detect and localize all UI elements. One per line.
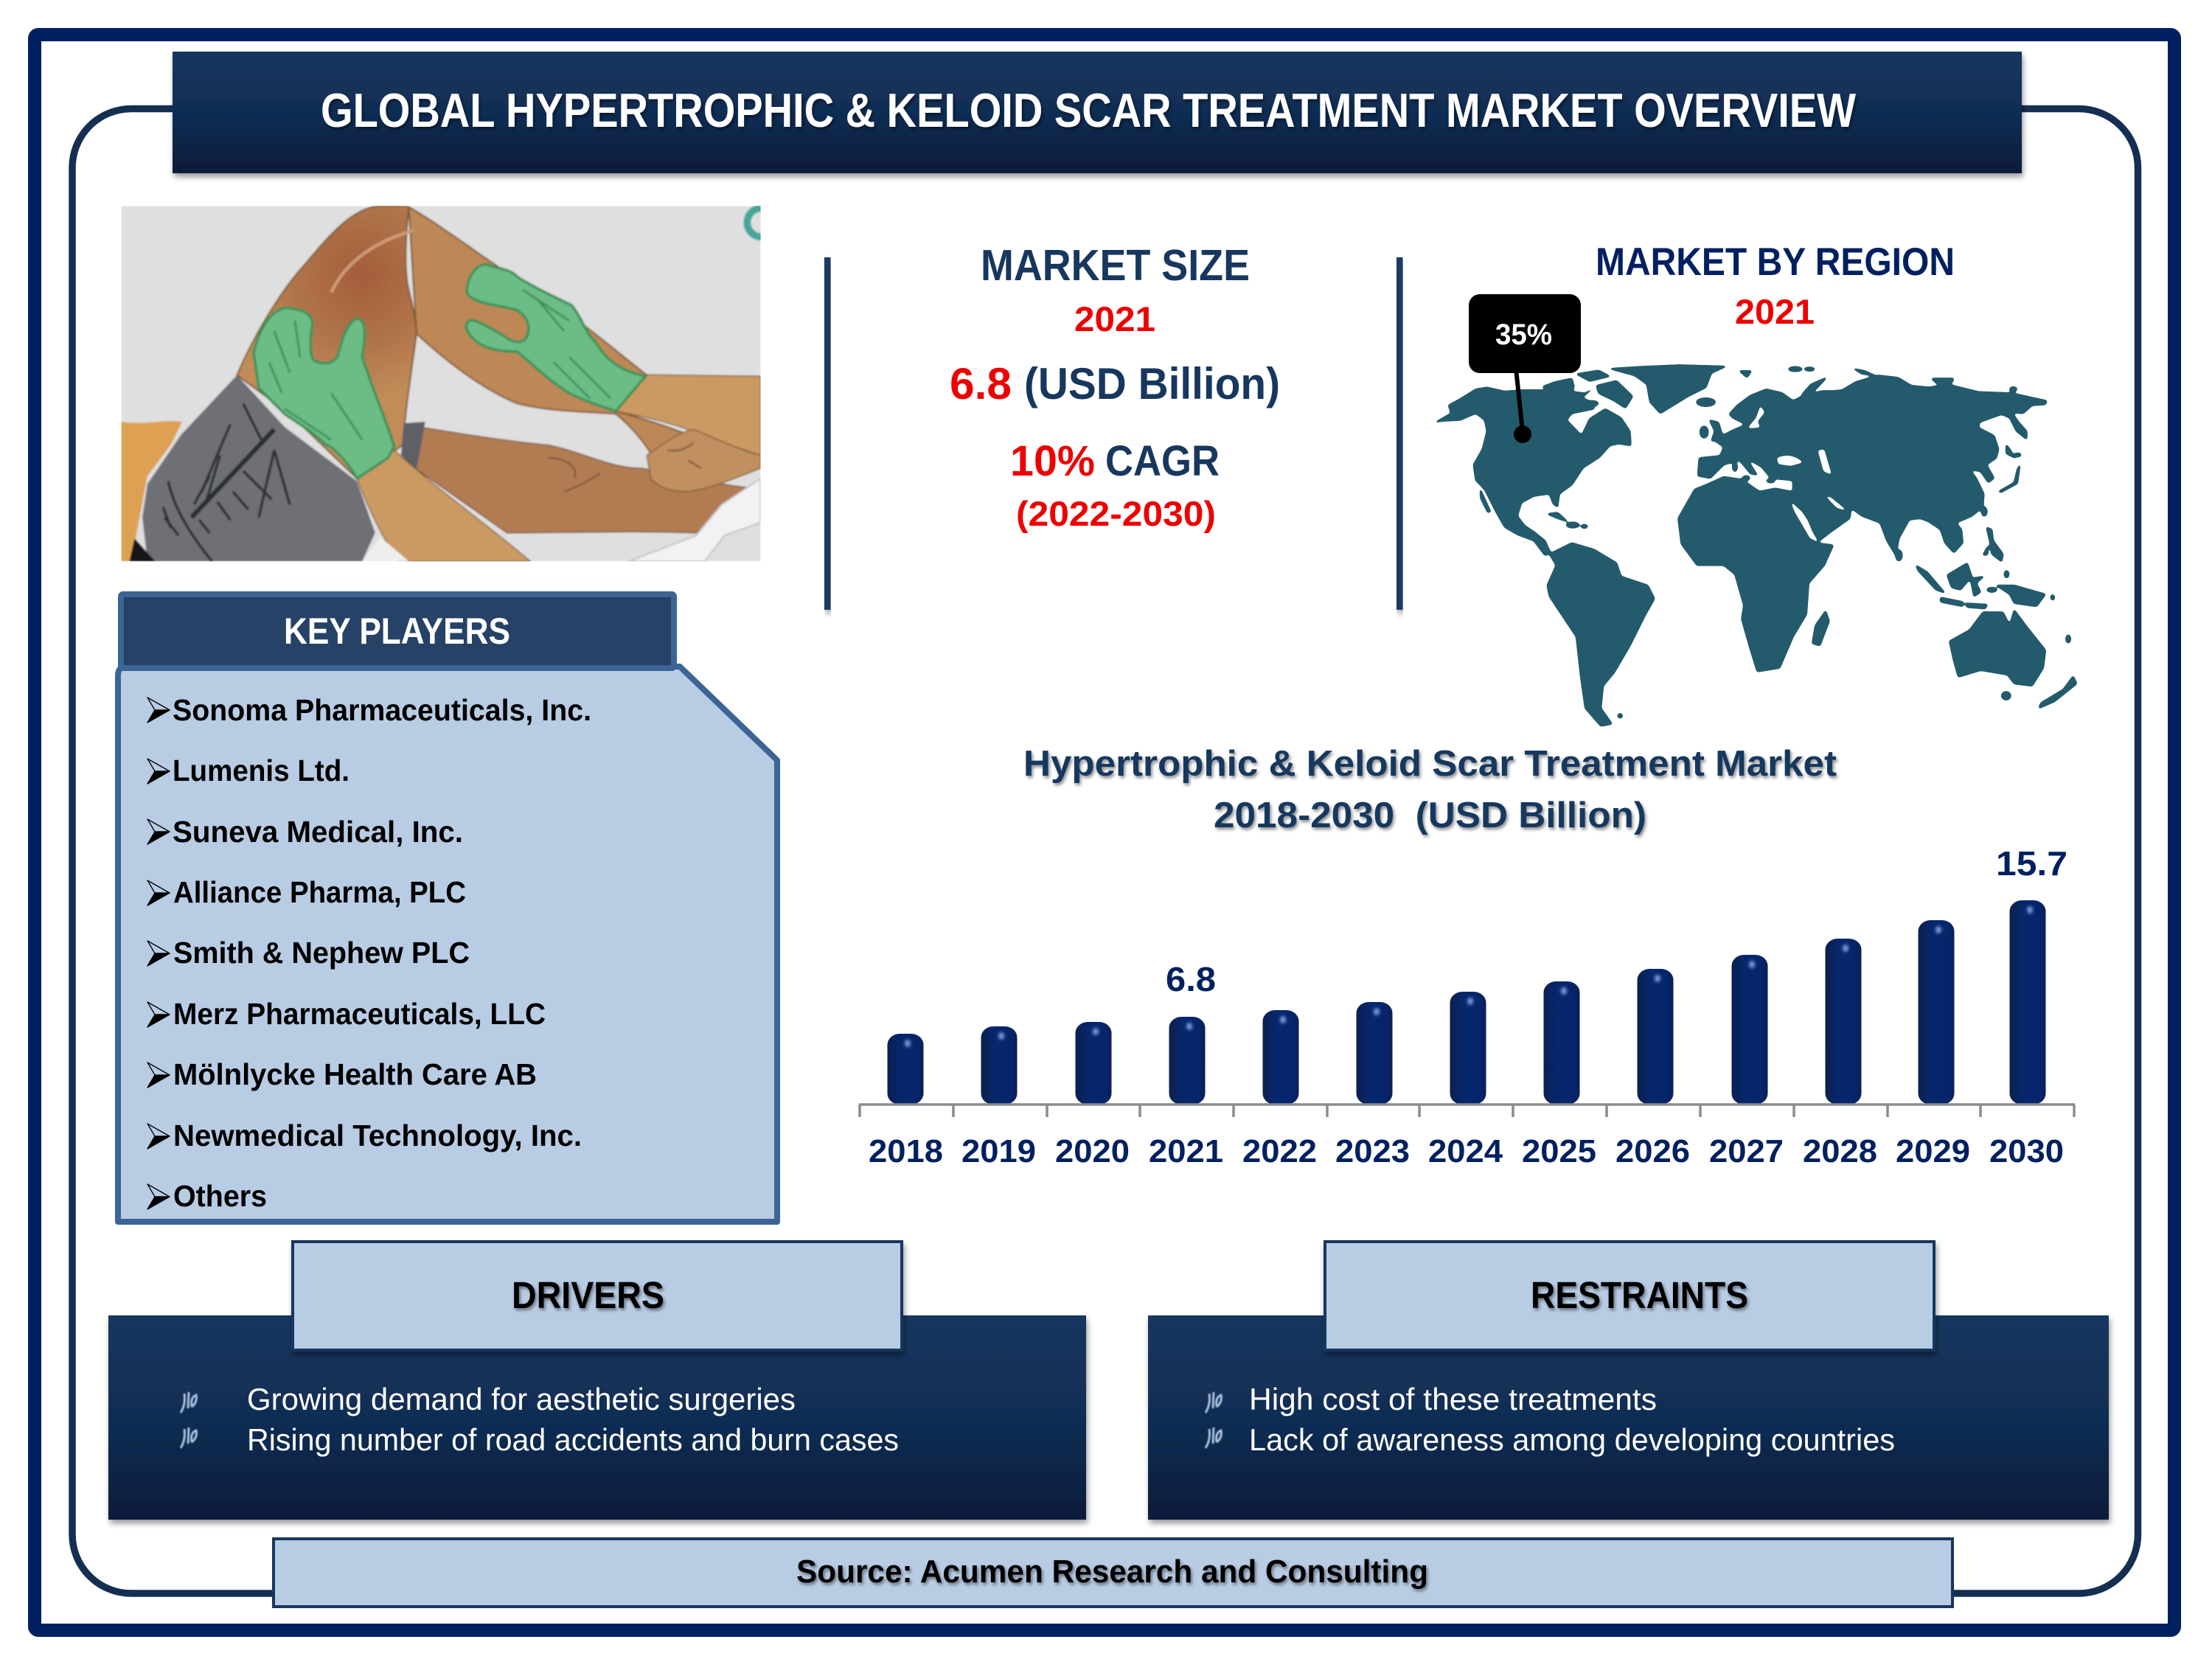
panel: market size: MARKET SIZE	[981, 241, 1250, 290]
company names: Suneva Medical, Inc.	[173, 815, 463, 849]
year labels: 2023	[1335, 1133, 1410, 1169]
bar chart	[859, 900, 2075, 1169]
company names	[173, 693, 591, 1213]
year labels	[869, 1133, 2064, 1169]
panel: restraints	[1148, 1242, 2109, 1520]
restraints heading tab: RESTRAINTS	[1531, 1274, 1748, 1316]
source bar: Source: Acumen Research and Consulting	[796, 1554, 1428, 1590]
company names: Merz Pharmaceuticals, LLC	[173, 997, 546, 1031]
company names: Lumenis Ltd.	[173, 754, 349, 787]
title banner: GLOBAL HYPERTROPHIC & KELOID SCAR TREATMENT MARKET OVERVIEW	[321, 83, 1857, 137]
company names: Smith & Nephew PLC	[173, 936, 470, 970]
divider: market size right	[1397, 257, 1402, 610]
year labels: 2018	[869, 1133, 943, 1169]
year labels: 2022	[1242, 1133, 1317, 1169]
drivers list	[247, 1382, 899, 1457]
axis	[859, 1105, 2075, 1117]
bar highlights	[905, 906, 2033, 1047]
year labels: 2030	[1989, 1133, 2064, 1169]
year labels: 2021	[1149, 1133, 1223, 1169]
restraints list	[1249, 1382, 1895, 1457]
panel: market size: (2022-2030)	[1016, 494, 1216, 533]
callout: 35% North America	[1469, 294, 1581, 443]
divider: market size left	[824, 257, 830, 610]
panel: market size: 2021	[1074, 299, 1155, 338]
panel: market size: 6.8	[950, 359, 1012, 408]
restraints list: Lack of awareness among developing countries	[1249, 1422, 1895, 1457]
source bar	[274, 1539, 1952, 1607]
restraints bullets	[1206, 1392, 1221, 1448]
company names: Mölnlycke Health Care AB	[173, 1057, 537, 1091]
panel: drivers	[108, 1242, 1086, 1520]
year labels: 2025	[1522, 1133, 1596, 1169]
chart title: 2018-2030 (USD Billion)	[1214, 796, 1646, 835]
panel: market size: (USD Billion)	[1024, 359, 1280, 408]
panel: market size	[950, 241, 1280, 533]
arrow bullets	[147, 698, 170, 1209]
chart title	[1023, 744, 1837, 835]
key players heading	[121, 594, 674, 668]
company names: Sonoma Pharmaceuticals, Inc.	[173, 693, 591, 727]
panel: market by region: 2021	[1735, 292, 1815, 331]
year labels: 2020	[1055, 1133, 1130, 1169]
value label 2021: 6.8	[1166, 960, 1216, 998]
year labels: 2026	[1615, 1133, 1690, 1169]
drivers list: Rising number of road accidents and burn cases	[247, 1422, 899, 1457]
callout: 35% North America: 35%	[1495, 319, 1552, 351]
panel: market by region: MARKET BY REGION	[1596, 240, 1955, 284]
year labels: 2029	[1896, 1133, 1970, 1169]
title banner	[173, 52, 2022, 173]
world map	[1436, 365, 2077, 726]
company names: Newmedical Technology, Inc.	[173, 1119, 582, 1152]
year labels: 2028	[1803, 1133, 1877, 1169]
drivers bullets	[181, 1392, 196, 1448]
panel: market size: CAGR	[1105, 437, 1220, 485]
chart title: Hypertrophic & Keloid Scar Treatment Market	[1023, 744, 1837, 784]
panel: key players list	[118, 594, 777, 1222]
key players heading: KEY PLAYERS	[284, 611, 510, 652]
drivers heading tab: DRIVERS	[512, 1274, 664, 1316]
panel: market by region	[1436, 240, 2077, 726]
year labels: 2019	[961, 1133, 1036, 1169]
year labels: 2024	[1428, 1133, 1503, 1169]
panel: market size: 10%	[1010, 437, 1095, 485]
illustration: scar treatment on a knee	[121, 206, 776, 561]
restraints heading tab	[1325, 1242, 1934, 1350]
company names: Alliance Pharma, PLC	[173, 875, 466, 909]
company names: Others	[173, 1179, 267, 1213]
drivers heading tab	[293, 1242, 902, 1350]
value label 2030: 15.7	[1996, 844, 2067, 883]
restraints list: High cost of these treatments	[1249, 1382, 1657, 1416]
drivers list: Growing demand for aesthetic surgeries	[247, 1382, 796, 1416]
bars	[888, 900, 2045, 1105]
year labels: 2027	[1709, 1133, 1784, 1169]
